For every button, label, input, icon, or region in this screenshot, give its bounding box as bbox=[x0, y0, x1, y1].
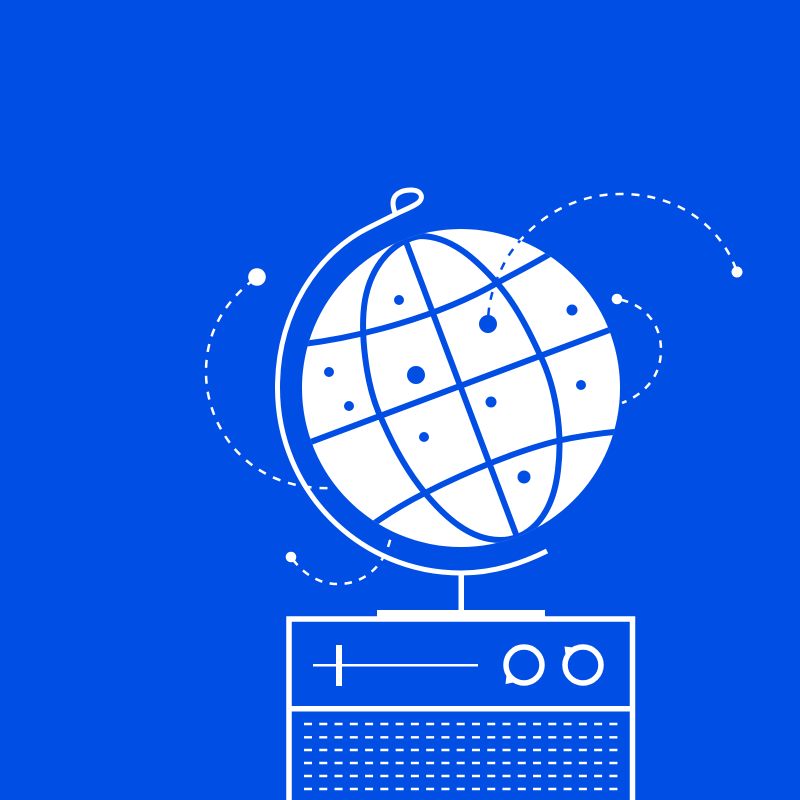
dashed orbit: left bbox=[206, 268, 332, 488]
tuner slider bbox=[313, 645, 478, 686]
dashed orbit: bottom bbox=[286, 536, 391, 584]
speaker grille bbox=[304, 724, 618, 789]
globe stand arc with loop bbox=[278, 190, 547, 573]
dashed orbit: right bbox=[612, 294, 661, 403]
blue dashed route on globe bbox=[487, 240, 522, 316]
knob left bbox=[506, 647, 542, 684]
radio body bbox=[289, 619, 632, 800]
stand base bbox=[377, 610, 545, 618]
grid lines bbox=[295, 236, 625, 540]
globe bbox=[302, 229, 620, 547]
knob right bbox=[564, 646, 601, 683]
radio bbox=[289, 619, 632, 800]
dashed orbit: upper right bbox=[488, 194, 742, 324]
city dots bbox=[324, 295, 586, 484]
divider bbox=[289, 706, 632, 712]
illustration: globe on a radio bbox=[204, 188, 742, 800]
stand post bbox=[458, 573, 464, 613]
